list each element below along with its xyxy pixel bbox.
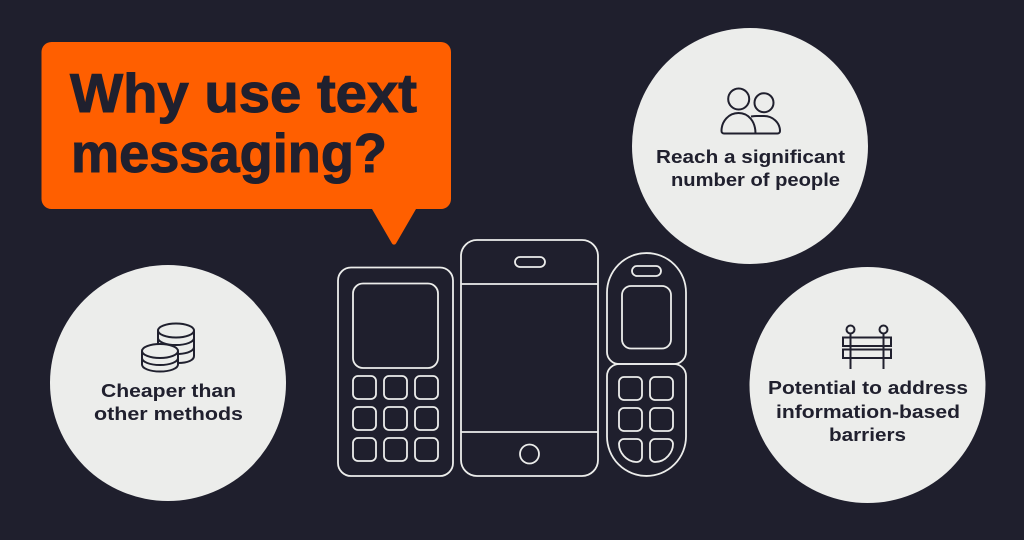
- panel: barriers: [750, 267, 986, 503]
- text: reach: [656, 146, 845, 190]
- title: Why use text: [70, 62, 417, 124]
- text: barriers: barriers: [829, 424, 906, 445]
- text: reach: Reach a significant: [656, 146, 845, 167]
- text: barriers: [768, 377, 968, 445]
- text: barriers: Potential to address: [768, 377, 968, 398]
- circle background: [632, 28, 868, 264]
- phone: flip phone: [607, 253, 686, 476]
- bubble shape with tail: [42, 42, 451, 245]
- text: cheaper: other methods: [94, 403, 243, 424]
- icon: bench: [843, 326, 891, 369]
- title speech bubble: [42, 42, 451, 245]
- text: cheaper: Cheaper than: [101, 380, 236, 401]
- phone: smartphone: [461, 240, 598, 476]
- title: [70, 62, 417, 184]
- phone: keypad candybar: [338, 268, 453, 476]
- text: cheaper: [94, 380, 243, 424]
- panel: reach: [632, 28, 868, 264]
- text: barriers: information-based: [776, 401, 960, 422]
- title: messaging?: [71, 122, 387, 184]
- circle background: [750, 267, 986, 503]
- circle background: [50, 265, 286, 501]
- phones illustration: [338, 240, 686, 476]
- icon: coins: [142, 324, 194, 372]
- icon: people: [722, 88, 780, 134]
- text: reach: number of people: [671, 169, 840, 190]
- panel: cheaper: [50, 265, 286, 501]
